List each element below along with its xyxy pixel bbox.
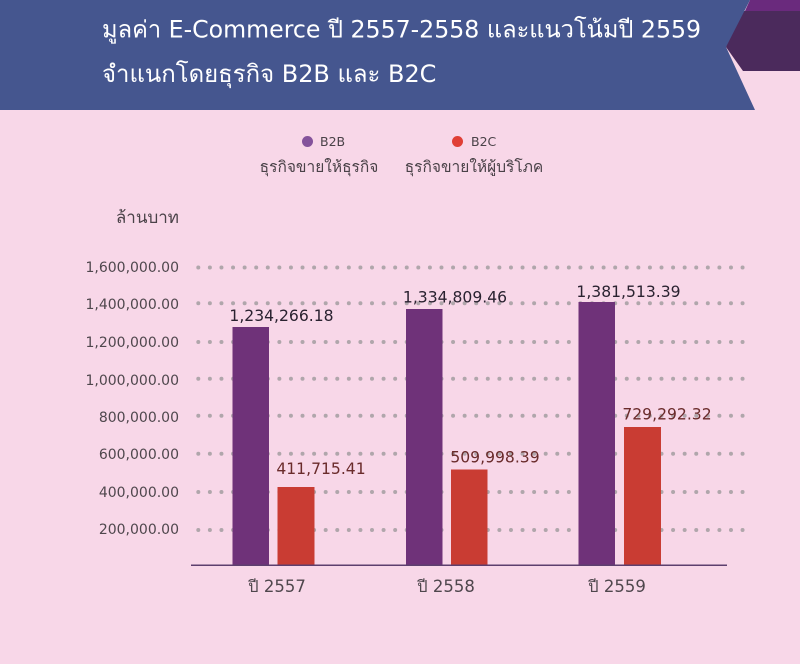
value labels: 509,998.39 xyxy=(450,449,540,467)
legend: B2B: B2B xyxy=(320,134,345,149)
value labels: 729,292.32 xyxy=(622,406,712,424)
legend: B2C: ธุรกิจขายให้ผู้บริโภค xyxy=(405,158,543,177)
value labels: 1,381,513.39 xyxy=(576,283,681,301)
y axis labels: 1,400,000.00 xyxy=(85,297,179,313)
value labels: 1,234,266.18 xyxy=(229,307,334,325)
legend: B2B: ธุรกิจขายให้ธุรกิจ xyxy=(260,158,378,177)
legend xyxy=(260,134,543,177)
y axis labels: 600,000.00 xyxy=(99,447,179,463)
x axis labels xyxy=(247,577,646,596)
y axis labels: 400,000.00 xyxy=(99,485,179,501)
y axis labels: 800,000.00 xyxy=(99,410,179,426)
banner ribbon xyxy=(0,0,800,110)
x axis labels: ปี 2557 xyxy=(247,577,306,596)
title: มูลค่า E-Commerce ปี 2557-2558 และแนวโน้มปี 2559 xyxy=(102,16,701,44)
x axis labels: ปี 2558 xyxy=(416,577,475,596)
legend: B2C: B2C xyxy=(471,134,497,149)
y axis labels xyxy=(85,260,179,538)
legend: B2B xyxy=(260,134,378,177)
baseline xyxy=(191,564,727,566)
title: จำแนกโดยธุรกิจ B2B และ B2C xyxy=(102,60,436,88)
y axis labels: 200,000.00 xyxy=(99,522,179,538)
value labels: 1,334,809.46 xyxy=(403,289,507,307)
title xyxy=(102,16,701,88)
value labels: 411,715.41 xyxy=(276,460,366,478)
x axis labels: ปี 2559 xyxy=(587,577,646,596)
bars: 2558 xyxy=(406,309,488,565)
y axis labels: 1,200,000.00 xyxy=(85,335,179,351)
bars: 2559 xyxy=(578,302,661,565)
unit label: ล้านบาท xyxy=(116,208,179,228)
y axis labels: 1,600,000.00 xyxy=(85,260,179,276)
legend: B2C xyxy=(405,134,543,177)
value labels xyxy=(229,283,712,478)
bars: 2557 xyxy=(232,327,314,565)
y axis labels: 1,000,000.00 xyxy=(85,373,179,389)
bar chart xyxy=(232,302,661,565)
